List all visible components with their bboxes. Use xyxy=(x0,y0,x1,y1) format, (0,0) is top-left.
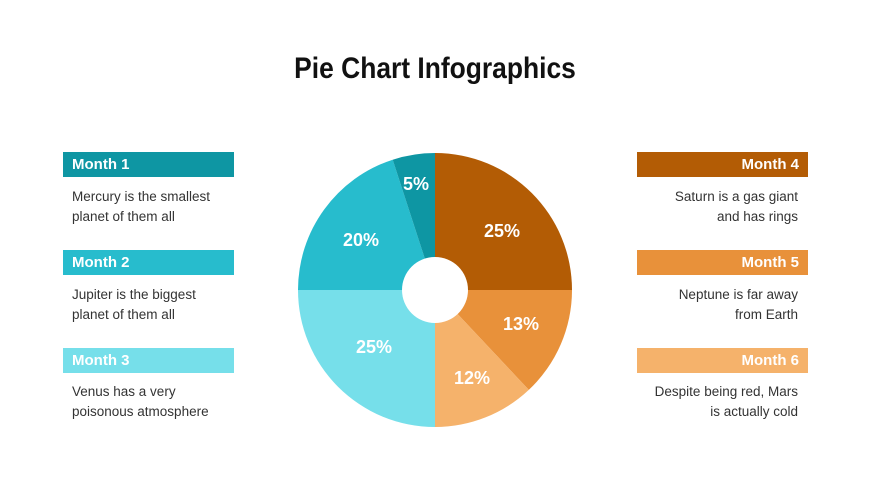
text: month 3: poisonous atmosphere xyxy=(72,404,209,419)
panel: month 2: Month 2 xyxy=(72,254,130,271)
pie chart: 25% xyxy=(484,221,520,241)
pie chart: 12% xyxy=(454,368,490,388)
text: month 1: planet of them all xyxy=(72,209,175,224)
text: month 5: Neptune is far away xyxy=(679,287,798,302)
pie chart: 20% xyxy=(343,230,379,250)
panel: month 5 xyxy=(637,250,808,275)
panel: month 4 xyxy=(637,152,808,177)
panel: month 3 xyxy=(63,348,234,373)
pie chart: 5% xyxy=(403,174,429,194)
pie chart: 13% xyxy=(503,314,539,334)
pie chart: 25% xyxy=(356,337,392,357)
text: month 1: Mercury is the smallest xyxy=(72,189,210,204)
text: month 2 xyxy=(72,287,196,322)
text: month 5: from Earth xyxy=(735,307,798,322)
text: month 3: Venus has a very xyxy=(72,384,176,399)
text: month 6: is actually cold xyxy=(710,404,798,419)
panel: month 3: Month 3 xyxy=(72,352,130,369)
text: month 2: planet of them all xyxy=(72,307,175,322)
text: month 6 xyxy=(655,384,798,419)
panel: month 1 xyxy=(63,152,234,177)
panel: month 1: Month 1 xyxy=(72,156,130,173)
panel: month 6 xyxy=(637,348,808,373)
text: month 4: and has rings xyxy=(717,209,798,224)
text: month 2: Jupiter is the biggest xyxy=(72,287,196,302)
text: month 3 xyxy=(72,384,209,419)
text: month 4: Saturn is a gas giant xyxy=(675,189,798,204)
panel: month 6: Month 6 xyxy=(742,352,799,369)
text: month 6: Despite being red, Mars xyxy=(655,384,798,399)
text: month 4 xyxy=(675,189,798,224)
panel: month 5: Month 5 xyxy=(742,254,799,271)
title: Pie Chart Infographics xyxy=(294,52,576,85)
text: month 5 xyxy=(679,287,798,322)
text: month 1 xyxy=(72,189,210,224)
panel: month 2 xyxy=(63,250,234,275)
panel: month 4: Month 4 xyxy=(742,156,799,173)
